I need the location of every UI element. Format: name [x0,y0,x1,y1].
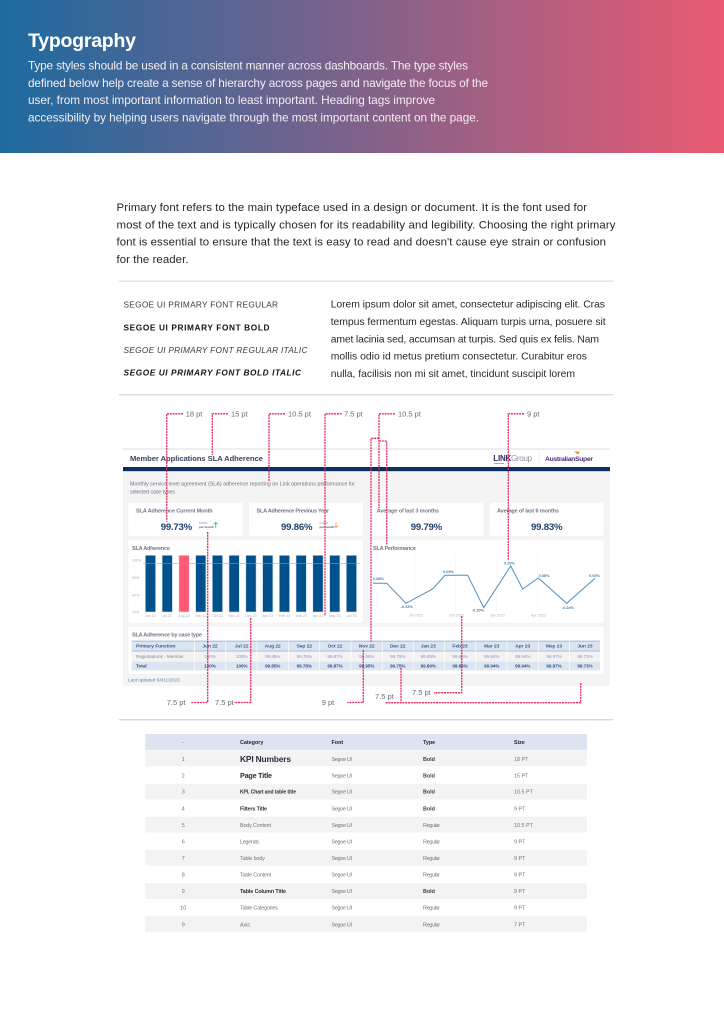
row 4: 4 [182,806,185,812]
data table: SLA adherence by case type: 99.78% [297,654,312,659]
row 2: Bold [423,773,435,779]
line chart: SLA performance: SLA Performance [373,546,416,552]
data table: SLA adherence by case type: Jun 22 [202,644,218,650]
row 7: 7 [182,856,185,862]
row 3 [182,790,534,796]
row 2: Page Title [240,771,272,780]
table header row: - [182,740,184,746]
data table: SLA adherence by case type: 99.75% [390,664,405,668]
line chart: SLA performance: 0.05% [539,574,550,578]
dashboard title: Member Applications SLA Adherence [130,454,263,463]
row 7: Regular [423,856,440,862]
KPI card: current month: SLA Adherence Current Month [136,508,213,514]
dashboard description: Monthly service level agreement (SLA) adherence reporting on Link operations performance for [130,481,355,487]
data table: SLA adherence by case type: 100% [236,654,247,659]
bar chart: SLA adherence: Nov 22 [229,614,240,618]
row 1: 18 PT [514,757,529,763]
row 1: Bold [423,757,435,763]
row 7 [182,856,526,862]
table header row [145,734,587,750]
annotation leaders: bottom: 7.5 pt [215,698,235,707]
logo: Link Group [493,454,532,464]
row 10 [180,906,526,912]
row 7: Table body [240,856,265,862]
annotation leaders: bottom: 7.5 pt [412,688,432,697]
row 11: Segoe UI [332,922,352,928]
bar chart: SLA adherence: Aug 22 [178,614,190,618]
data table: SLA adherence by case type: 99.85% [265,664,280,668]
table header row: Type [423,740,435,746]
KPI card: current month: 0.03% [199,521,208,525]
data table: SLA adherence by case type: Sep 22 [297,644,312,650]
annotation leaders: top: 9 pt [527,410,540,418]
data table: SLA adherence by case type: 99.94% [484,654,499,659]
row 9: Table Column Title [240,889,286,895]
bar chart: SLA adherence: Sep 22 [195,614,206,618]
row 2: 15 PT [514,773,529,779]
KPI card: previous year: per month [320,525,334,529]
bar chart: SLA adherence: Oct 22 [212,614,223,618]
data table: SLA adherence by case type: Jan 23 [421,644,436,650]
line chart: SLA performance: 0.08% [373,577,384,581]
lorem ipsum sample: Lorem ipsum dolor sit amet, consectetur adipiscing elit. Cras [331,300,605,310]
row 10: Regular [423,906,440,912]
annotation leaders: top: 7.5 pt [344,410,364,418]
line chart: SLA performance: -0.24% [562,606,575,610]
line chart: SLA performance: Apr 2023 [531,614,546,618]
data table: SLA adherence by case type: 99.95% [359,654,374,659]
KPI card: last 3 months: Average of last 3 months [377,508,439,514]
bar chart: SLA adherence: SLA Adherence [132,546,170,552]
row 4: Filters Title [240,806,267,812]
primary font paragraph: for the reader. [116,254,188,266]
logo: AustralianSuper: AustralianSuper [545,456,593,463]
logo: Link Group: LINK [493,454,512,463]
row 6: 9 PT [514,839,526,845]
row 6: Segoe UI [332,839,352,845]
row 9: Segoe UI [332,889,352,895]
data table: SLA adherence by case type: 99.97% [546,664,562,668]
row 7: Segoe UI [332,856,352,862]
line chart: SLA performance: Jan 2023 [490,614,505,618]
data table: SLA adherence by case type: 99.86% [452,664,468,668]
row 8 [182,873,526,879]
font style samples: SEGOE UI PRIMARY FONT BOLD [124,322,270,332]
bar chart: SLA adherence: Jan 23 [262,614,273,618]
row 3: 10.5 PT [514,790,534,796]
line chart: SLA performance: -0.13% [401,605,413,609]
row 4: Bold [423,806,435,812]
row 3: KPI, Chart and table title [240,790,296,796]
annotation leaders: top [167,410,540,642]
KPI card: previous year [249,503,363,536]
data table: SLA adherence by case type: Primary Function [136,644,176,650]
KPI card: previous year: 0.03% [320,521,328,525]
row 5: 10.5 PT [514,823,534,829]
primary font paragraph: most of the text and is typically chosen for its readability and legibility. Choosing the right primary [116,220,616,232]
annotation leaders: bottom: 7.5 pt [375,692,395,701]
header intro text: Type styles should be used in a consistent manner across dashboards. The type styles [28,58,468,72]
row 6 [182,839,526,845]
row 1: Segoe UI [332,757,352,763]
bar chart: SLA adherence: Jul 22 [163,614,172,618]
data table: SLA adherence by case type: Nov 22 [359,644,375,650]
line chart: SLA performance: 0.09% [443,570,454,574]
data table: SLA adherence by case type: 99.85% [265,654,280,659]
data table: SLA adherence by case type: SLA Adherence by case type [132,632,202,638]
row 11: 9 [182,922,185,928]
bar chart: SLA adherence: Apr 23 [313,614,323,618]
KPI card: previous year: SLA Adherence Previous Year [256,508,330,514]
row 2: 2 [182,773,185,779]
annotation leaders: bottom: 9 pt [322,698,335,707]
bar chart: SLA adherence: May 23 [329,614,341,618]
row 10: 9 PT [514,906,526,912]
row 3: Segoe UI [332,790,352,796]
bar chart: SLA adherence: 70% [132,610,140,614]
row 4 [182,806,526,812]
line chart: SLA performance [369,540,604,623]
row 8: Table Content [240,873,272,879]
bar chart: SLA adherence: Dec 22 [245,614,257,618]
row 9 [182,889,526,895]
lorem ipsum sample: mollis odio id metus pretium consectetur. Curabitur eros [331,352,587,362]
row 3: 3 [182,790,185,796]
row 8: Regular [423,873,440,879]
row 9: 9 PT [514,889,526,895]
data table: SLA adherence by case type: 99.97% [546,654,562,659]
primary font paragraph: Primary font refers to the main typeface used in a design or document. It is the font used for [116,202,587,214]
lorem ipsum sample: nulla, facilisis non mi sit amet, tincidunt suscipit lorem [331,369,575,380]
row 10: Table Categories [240,906,278,912]
line chart: SLA performance: Jul 2023 [409,614,423,618]
row 5: Segoe UI [332,823,352,829]
bar chart: SLA adherence: Mar 23 [296,614,307,618]
KPI card: current month: 99.73% [161,522,193,533]
data table: SLA adherence by case type: Aug 22 [265,644,281,650]
data table: SLA adherence by case type: 99.89% [421,654,436,659]
line chart: SLA performance: -0.20% [472,609,485,613]
KPI card: current month: per month [199,525,214,529]
font style samples [124,300,308,378]
header intro text: user, from most important information to least important. Heading tags improve [28,93,435,107]
lorem ipsum sample: amet lacinia sed, accumsan at turpis. Sed quis ex felis. Nam [331,334,599,345]
row 8: 8 [182,873,185,879]
logo: AustralianSuper [545,452,593,463]
row 9: 9 [182,889,185,895]
bar chart: SLA adherence: Feb 23 [279,614,290,618]
data table: SLA adherence by case type: 99.94% [484,664,499,668]
KPI card: previous year: 99.86% [281,522,313,533]
line chart: SLA performance: 0.20% [504,562,515,566]
row 7: 9 PT [514,856,526,862]
row 3: Bold [423,790,435,796]
row 5: Regular [423,823,440,829]
data table: SLA adherence by case type: 99.89% [421,664,436,668]
logo: Link Group: Group [511,454,532,463]
primary font paragraph [116,202,616,266]
data table: SLA adherence by case type [128,627,604,674]
row 1: 1 [182,757,185,763]
row 2 [182,771,529,780]
data table: SLA adherence by case type: 99.75% [390,654,405,659]
row 10: Segoe UI [332,906,352,912]
annotation leaders: top: 15 pt [231,410,249,418]
data table: SLA adherence by case type: 99.87% [327,654,343,659]
row 4: 9 PT [514,806,526,812]
dashboard example [123,448,610,686]
bar chart: SLA adherence: 80% [132,593,140,597]
data table: SLA adherence by case type: 99.73% [577,654,593,659]
data table: SLA adherence by case type: 99.73% [577,664,593,668]
row 8: 9 PT [514,873,526,879]
data table: SLA adherence by case type: 99.87% [327,664,343,668]
data table: SLA adherence by case type: May 23 [546,644,562,650]
lorem ipsum sample [331,300,606,380]
data table: SLA adherence by case type: Mar 23 [484,644,500,650]
data table: SLA adherence by case type: 99.95% [359,664,374,668]
header intro text: defined below help create a sense of hierarchy across pages and navigate the focus of the [28,76,488,90]
row 11: Axis [240,922,250,928]
row 6: Regular [423,839,440,845]
data table: SLA adherence by case type: 99.94% [515,654,530,659]
table header row: Size [514,740,525,746]
KPI card: last 6 months: Average of last 6 months [497,508,559,514]
primary font paragraph: font is essential to ensure that the text is easy to read and doesn't cause eye strain or confusion [116,236,606,248]
data table: SLA adherence by case type: Registrations - Member [136,654,184,659]
data table: SLA adherence by case type: 99.86% [452,654,468,659]
bar chart: SLA adherence: 100% [132,558,142,562]
row 5: Body Content [240,823,272,829]
KPI card: last 6 months [490,503,604,536]
row 1 [182,754,529,764]
row 1: KPI Numbers [240,754,291,764]
row 8: Segoe UI [332,873,352,879]
last updated note: Last updated 04/11/2023 [128,678,180,684]
table header row: Font [332,740,343,746]
KPI card: last 6 months: 99.83% [531,522,563,533]
data table: SLA adherence by case type: 99.78% [297,664,312,668]
annotation leaders: bottom: 7.5 pt [167,698,186,707]
title: Typography [28,30,136,52]
data table: SLA adherence by case type: Feb 23 [452,644,468,650]
data table: SLA adherence by case type: Apr 23 [515,644,530,650]
data table: SLA adherence by case type: Total [136,664,147,668]
font style samples: SEGOE UI PRIMARY FONT REGULAR [124,300,278,310]
row 4: Segoe UI [332,806,352,812]
type scale table [145,734,587,932]
data table: SLA adherence by case type: Oct 22 [328,644,343,650]
annotation leaders: top: 10.5 pt [288,410,312,418]
row 11: 7 PT [514,922,526,928]
data table: SLA adherence by case type: 100% [204,654,216,659]
KPI card: last 3 months [369,503,483,536]
dashboard description [130,481,355,495]
row 6: 6 [182,839,185,845]
data table: SLA adherence by case type: Jul 22 [235,644,249,650]
row 9: Bold [423,889,435,895]
annotation leaders: top: 18 pt [186,410,203,418]
bar chart: SLA adherence: Jun 22 [145,614,156,618]
KPI card: current month [128,503,243,536]
row 10: 10 [180,906,186,912]
row 5: 5 [182,823,185,829]
row 5 [182,823,534,829]
header banner [0,0,724,153]
table header row: Category [240,740,263,746]
data table: SLA adherence by case type: Jun 23 [577,644,593,650]
data table: SLA adherence by case type: 100% [236,664,247,668]
dashboard description: selected case types [130,489,175,495]
row 2: Segoe UI [332,773,352,779]
data table: SLA adherence by case type: Dec 22 [390,644,406,650]
font style samples: SEGOE UI PRIMARY FONT BOLD ITALIC [124,368,302,378]
bar chart: SLA adherence [128,540,363,623]
data table: SLA adherence by case type: 100% [204,664,216,668]
font style samples: SEGOE UI PRIMARY FONT REGULAR ITALIC [124,345,308,355]
data table: SLA adherence by case type: 99.94% [515,664,530,668]
annotation leaders: top: 10.5 pt [398,410,422,418]
bar chart: SLA adherence: 90% [132,576,140,580]
bar chart: SLA adherence: Jun 23 [346,614,357,618]
row 11: Regular [423,922,440,928]
line chart: SLA performance: 0.03% [589,574,600,578]
annotation leaders: bottom [167,532,581,707]
lorem ipsum sample: tempus fermentum egestas. Aliquam turpis urna, posuere sit [331,317,606,328]
header intro text [28,58,488,124]
KPI card: last 3 months: 99.79% [411,522,443,533]
row 6: Legends [240,839,259,845]
header intro text: accessibility by helping users navigate through the most important content on the page. [28,110,479,124]
line chart: SLA performance: Oct 2023 [449,614,464,618]
row 11 [182,922,526,928]
